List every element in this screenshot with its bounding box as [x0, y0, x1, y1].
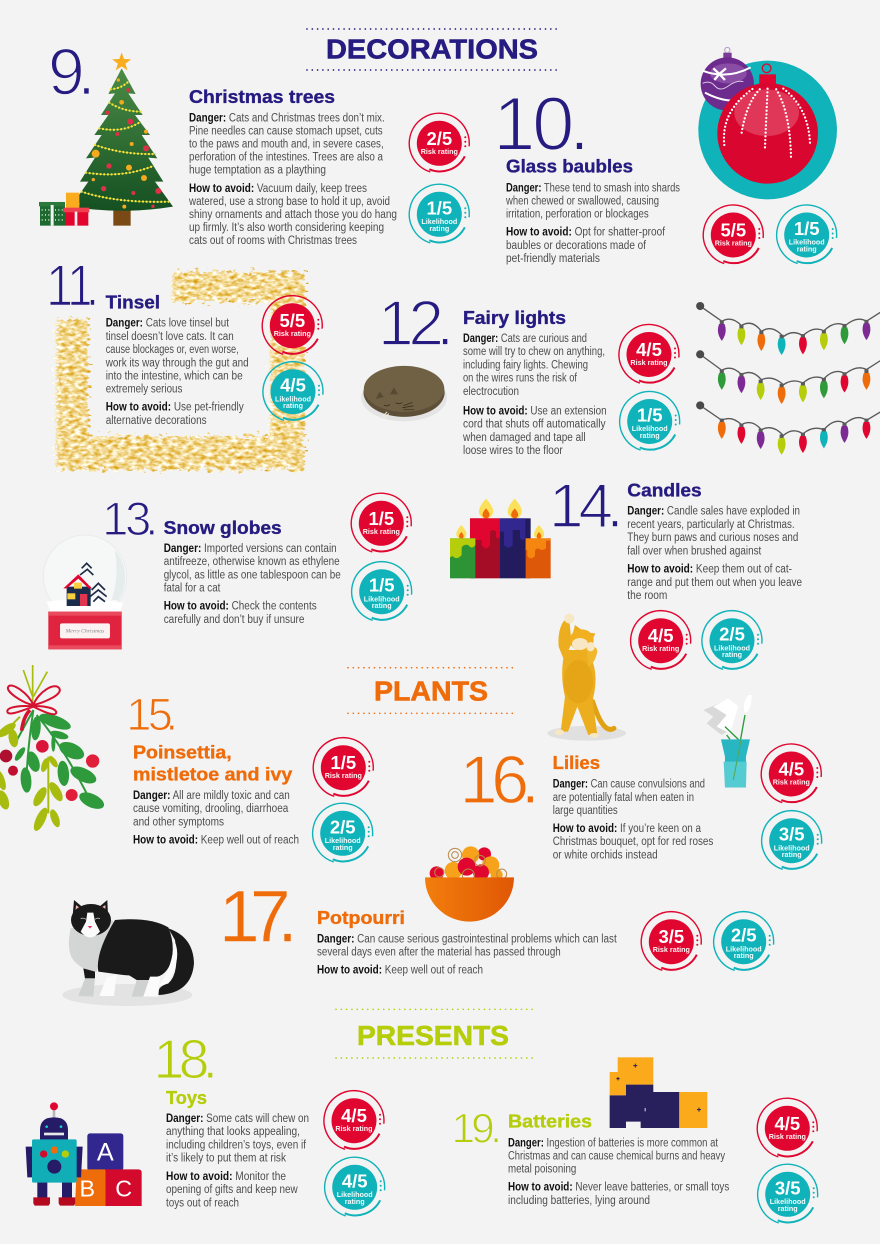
title: Batteries	[508, 1111, 592, 1131]
body text	[627, 506, 802, 602]
body text: huge temptation as a plaything	[189, 164, 326, 176]
title: Tinsel	[106, 292, 160, 312]
body text	[105, 318, 249, 427]
badge: likelihood 1/5: rating	[372, 601, 392, 610]
badge: likelihood 4/5: rating	[283, 401, 303, 410]
body text: are potentially fatal when eaten in	[553, 792, 694, 804]
number 18: 18.	[154, 1028, 218, 1090]
body text: cats out of rooms with Christmas trees	[189, 235, 357, 247]
illustration: potpourri bowl	[425, 846, 514, 922]
badge: likelihood 3/5: rating	[782, 850, 802, 859]
panel: 11 Tinsel	[46, 254, 323, 470]
badge: likelihood 2/5: 2/5	[330, 816, 356, 837]
badge: risk 1/5: Risk rating	[325, 771, 362, 780]
illustration: lilies in vase	[703, 695, 752, 787]
badge: likelihood 2/5: 2/5	[719, 624, 745, 645]
body text	[508, 1137, 730, 1207]
illustration: mistletoe	[0, 665, 107, 833]
illustration: robot and blocks: B	[80, 1176, 95, 1202]
badge: likelihood 1/5: 1/5	[369, 575, 395, 596]
body text: including fairy lights. Chewing	[463, 359, 588, 371]
body text: carefully and don’t buy if unsure	[164, 614, 304, 626]
body text: Danger: Cats love tinsel but	[106, 318, 230, 330]
body text: metal poisoning	[508, 1164, 576, 1176]
body text: Christmas bouquet, opt for red roses	[553, 836, 714, 848]
body text: How to avoid: Keep well out of reach	[317, 964, 483, 976]
body text: alternative decorations	[106, 415, 207, 427]
illustration: Christmas tree	[39, 52, 173, 226]
badge: likelihood 1/5: rating	[640, 431, 660, 440]
body text: when damaged and tape all	[462, 432, 586, 444]
badge: likelihood 4/5: 4/5	[280, 375, 306, 396]
badge: likelihood 2/5: rating	[333, 843, 353, 852]
title: Poinsettia,	[133, 743, 232, 763]
illustration: robot and blocks: C	[115, 1176, 132, 1202]
body text: fatal for a cat	[164, 583, 221, 595]
illustration: baubles	[698, 47, 837, 199]
number 19: 19.	[452, 1105, 502, 1152]
body text	[553, 779, 714, 861]
badge: likelihood 1/5	[409, 184, 469, 243]
badge: likelihood 4/5	[325, 1157, 385, 1216]
body text: Danger: Imported versions can contain	[164, 543, 337, 555]
number 12: 12.	[378, 287, 454, 359]
badge: risk 5/5	[262, 296, 322, 354]
illustration: robot and blocks: A	[97, 1139, 114, 1167]
body text: cord that shuts off automatically	[463, 419, 606, 431]
badge: likelihood 4/5: rating	[345, 1197, 365, 1206]
badge: likelihood 3/5	[758, 1164, 818, 1223]
badge: likelihood 4/5	[263, 362, 323, 420]
badge: likelihood 1/5: Likelihood	[421, 217, 457, 226]
panel: 10 Glass baubles	[493, 47, 837, 265]
body text: to the paws and mouth and, in severe cases,	[189, 138, 384, 150]
body text: Danger: Cats and Christmas trees don’t mix.	[189, 112, 385, 124]
body text: some will try to chew on anything,	[463, 346, 605, 358]
body text: anything that looks appealing,	[166, 1126, 300, 1138]
body text: including children’s toys, even if	[166, 1139, 307, 1151]
body text: watered, use a strong base to hold it up, avoid	[188, 196, 390, 208]
panel: 13 Snow globes	[43, 492, 412, 649]
badge: risk 4/5: 4/5	[636, 339, 662, 360]
panel: 16 Lilies	[460, 695, 822, 869]
panel: 14 Candles	[450, 472, 802, 669]
number 13: 13.	[102, 492, 158, 545]
body text: How to avoid: Vacuum daily, keep trees	[189, 183, 367, 195]
badge: likelihood 3/5: 3/5	[775, 1177, 801, 1198]
body text: How to avoid: Keep well out of reach	[133, 835, 299, 847]
body text: Danger: Ingestion of batteries is more common at	[508, 1137, 719, 1149]
badge: likelihood 1/5: Likelihood	[364, 594, 400, 603]
badge: likelihood 4/5: Likelihood	[337, 1190, 373, 1199]
badge: risk 4/5: Risk rating	[642, 644, 679, 653]
body text: How to avoid: If you’re keen on a	[553, 823, 702, 835]
badge: risk 5/5	[703, 205, 763, 264]
badge: risk 3/5: Risk rating	[653, 945, 690, 954]
body text: electrocution	[463, 386, 519, 398]
badge: likelihood 1/5: rating	[797, 244, 817, 254]
panel: 9 Christmas trees	[39, 34, 469, 247]
body text: shiny ornaments and attach those you do hang	[189, 209, 397, 221]
title: Lilies	[553, 753, 600, 773]
body text: toys out of reach	[166, 1197, 239, 1209]
body text: Christmas and can cause chemical burns and heavy	[508, 1150, 725, 1162]
body text: How to avoid: Use pet-friendly	[106, 402, 244, 414]
title: Christmas trees	[189, 87, 335, 107]
badge: risk 4/5: 4/5	[648, 625, 674, 646]
body text: on the wires runs the risk of	[463, 373, 578, 385]
badge: likelihood 1/5: 1/5	[426, 197, 452, 218]
body text: How to avoid: Never leave batteries, or small toys	[508, 1182, 730, 1194]
body text: Danger: These tend to smash into shards	[506, 182, 680, 194]
badge: likelihood 2/5	[702, 611, 762, 669]
badge: likelihood 3/5	[762, 811, 822, 869]
illustration: snow globe: Merry Christmas	[65, 629, 105, 635]
illustration: dancing ginger cat	[547, 614, 626, 741]
badge: risk 4/5: 4/5	[778, 758, 804, 780]
body text	[188, 112, 397, 247]
badge: likelihood 1/5	[620, 391, 680, 450]
body text	[505, 182, 680, 265]
badge: likelihood 3/5: Likelihood	[770, 1197, 806, 1206]
heading: Decorations	[307, 29, 557, 70]
badge: likelihood 2/5: Likelihood	[325, 836, 361, 845]
body text: Danger: Cats are curious and	[463, 333, 587, 345]
badge: risk 1/5	[351, 493, 411, 552]
body text: Danger: Can cause serious gastrointestinal problems which can last	[317, 933, 617, 945]
badge: risk 4/5	[757, 1098, 817, 1157]
badge: risk 3/5	[641, 912, 701, 970]
badge: likelihood 3/5: Likelihood	[774, 843, 810, 852]
body text: several days even after the material has passed through	[317, 946, 561, 958]
badge: risk 4/5: Risk rating	[335, 1124, 373, 1133]
illustration: black and white cat	[62, 900, 194, 1006]
badge: risk 5/5: 5/5	[279, 310, 305, 331]
body text: irritation, perforation or blockages	[506, 209, 649, 221]
title: Candles	[627, 481, 702, 501]
badge: risk 2/5: Risk rating	[421, 147, 458, 156]
number 9: 9.	[48, 34, 96, 108]
body text	[462, 333, 607, 457]
illustration: sleeping cat	[361, 366, 447, 421]
illustration: snow globe	[43, 535, 127, 649]
panel: 12 Fairy lights	[361, 287, 880, 457]
number 17: 17.	[219, 877, 298, 958]
badge: likelihood 2/5: Likelihood	[714, 643, 750, 652]
badge: risk 5/5: 5/5	[720, 220, 746, 240]
badge: risk 4/5: 4/5	[774, 1113, 800, 1134]
body text: Danger: Can cause convulsions and	[553, 779, 705, 791]
badge: likelihood 2/5: 2/5	[731, 925, 757, 946]
body text: perforation of the intestines. Trees are also a	[189, 151, 384, 163]
body text: including batteries, lying around	[508, 1195, 650, 1207]
title: Glass baubles	[506, 157, 633, 177]
body text: Danger: Some cats will chew on	[166, 1113, 309, 1125]
body text: when chewed or swallowed, causing	[505, 196, 659, 208]
heading: Plants: PLANTS	[374, 676, 488, 707]
number 11: 11.	[46, 254, 99, 319]
body text	[166, 1113, 309, 1209]
body text	[133, 790, 299, 847]
badge: likelihood 1/5: 1/5	[637, 404, 663, 426]
badge: risk 5/5: Risk rating	[274, 329, 311, 338]
badge: likelihood 1/5	[777, 205, 837, 264]
body text: Pine needles can cause stomach upset, cuts	[189, 125, 383, 137]
body text: Danger: All are mildly toxic and can	[133, 790, 290, 802]
badge: risk 1/5	[313, 738, 373, 796]
body text: and other symptoms	[133, 816, 224, 828]
body text: pet-friendly materials	[506, 253, 600, 265]
body text: recent years, particularly at Christmas.	[627, 519, 795, 531]
body text: How to avoid: Use an extension	[463, 406, 607, 418]
title: Toys	[166, 1088, 207, 1108]
badge: likelihood 2/5: Likelihood	[726, 944, 762, 953]
body text: cause blockages or, even worse,	[106, 344, 239, 356]
badge: risk 1/5: 1/5	[330, 752, 356, 773]
badge: likelihood 1/5	[352, 562, 412, 620]
badge: risk 4/5	[761, 744, 821, 803]
panel: 19 Batteries	[452, 1057, 818, 1223]
title	[133, 743, 292, 785]
badge: likelihood 1/5: 1/5	[794, 218, 820, 239]
heading: Presents: PRESENTS	[357, 1020, 509, 1051]
badge: likelihood 2/5	[313, 803, 373, 862]
body text: fall over when brushed against	[627, 545, 762, 557]
badge: risk 2/5	[409, 113, 469, 172]
body text: range and put them out when you leave	[627, 577, 802, 589]
badge: likelihood 2/5: rating	[734, 951, 754, 960]
badge: likelihood 3/5: 3/5	[779, 824, 805, 845]
body text: loose wires to the floor	[463, 445, 563, 457]
body text: baubles or decorations made of	[506, 240, 647, 252]
number 15: 15.	[126, 689, 178, 740]
body text: into the intestine, which can be	[106, 370, 243, 382]
title: Fairy lights	[463, 308, 566, 328]
badge: risk 4/5: Risk rating	[773, 778, 810, 786]
badge: risk 4/5: Risk rating	[630, 358, 668, 367]
body text: opening of gifts and keep new	[166, 1184, 298, 1196]
badge: risk 4/5: 4/5	[341, 1105, 367, 1126]
illustration: fairy light strings	[696, 302, 880, 455]
badge: risk 4/5	[631, 611, 691, 669]
body text: tinsel doesn’t love cats. It can	[106, 331, 234, 343]
heading: Decorations: DECORATIONS	[326, 34, 538, 65]
badge: likelihood 2/5: rating	[722, 650, 742, 659]
number 14: 14.	[549, 472, 624, 541]
badge: risk 4/5	[324, 1091, 384, 1149]
body text: Danger: Candle sales have exploded in	[627, 506, 800, 518]
badge: risk 5/5: Risk rating	[715, 238, 752, 248]
badge: risk 2/5: 2/5	[426, 128, 452, 149]
body text: large quantities	[553, 805, 618, 817]
body text	[317, 933, 617, 976]
body text: How to avoid: Keep them out of cat-	[627, 564, 792, 576]
badge: risk 4/5: Risk rating	[769, 1132, 806, 1141]
body text: or white orchids instead	[553, 849, 658, 861]
title: mistletoe and ivy	[133, 765, 292, 785]
illustration: candles	[450, 499, 551, 578]
body text: cause vomiting, drooling, diarrhoea	[133, 803, 289, 815]
illustration: tinsel frame	[56, 272, 304, 470]
badge: risk 1/5: 1/5	[368, 508, 394, 529]
heading: Plants	[348, 668, 513, 713]
body text: work its way through the gut and	[105, 357, 249, 369]
heading: Presents	[336, 1009, 534, 1058]
body text: the room	[627, 590, 667, 602]
badge: likelihood 1/5: Likelihood	[789, 238, 825, 247]
illustration: robot and blocks	[26, 1102, 142, 1206]
body text: How to avoid: Check the contents	[164, 601, 317, 613]
panel: 17 Potpourri	[62, 846, 774, 1006]
badge: risk 4/5	[619, 324, 679, 383]
body text: glycol, as little as one tablespoon can be	[164, 569, 341, 581]
body text: antifreeze, otherwise known as ethylene	[164, 556, 340, 568]
body text: it’s likely to put them at risk	[166, 1153, 286, 1165]
title: Snow globes	[164, 518, 282, 538]
title: Potpourri	[317, 908, 405, 928]
badge: likelihood 3/5: rating	[778, 1204, 798, 1213]
body text: How to avoid: Opt for shatter-proof	[506, 227, 666, 239]
badge: likelihood 1/5: Likelihood	[632, 424, 668, 433]
number 10: 10.	[493, 82, 590, 167]
panel: 15 Poinsettia, mistletoe and ivy	[0, 665, 373, 862]
body text: They burn paws and curious noses and	[627, 532, 798, 544]
body text: extremely serious	[106, 384, 183, 396]
badge: likelihood 2/5	[714, 912, 774, 970]
badge: risk 3/5: 3/5	[658, 926, 684, 947]
body text	[164, 543, 341, 626]
number 16: 16.	[460, 742, 540, 818]
badge: likelihood 4/5: Likelihood	[275, 394, 311, 403]
body text: up firmly. It’s also worth considering keeping	[189, 222, 384, 234]
body text: How to avoid: Monitor the	[166, 1171, 286, 1183]
badge: likelihood 4/5: 4/5	[342, 1170, 368, 1191]
panel: 18 Toys	[26, 1028, 385, 1216]
badge: risk 1/5: Risk rating	[363, 527, 400, 536]
illustration: batteries	[610, 1057, 707, 1128]
badge: likelihood 1/5: rating	[429, 224, 449, 233]
